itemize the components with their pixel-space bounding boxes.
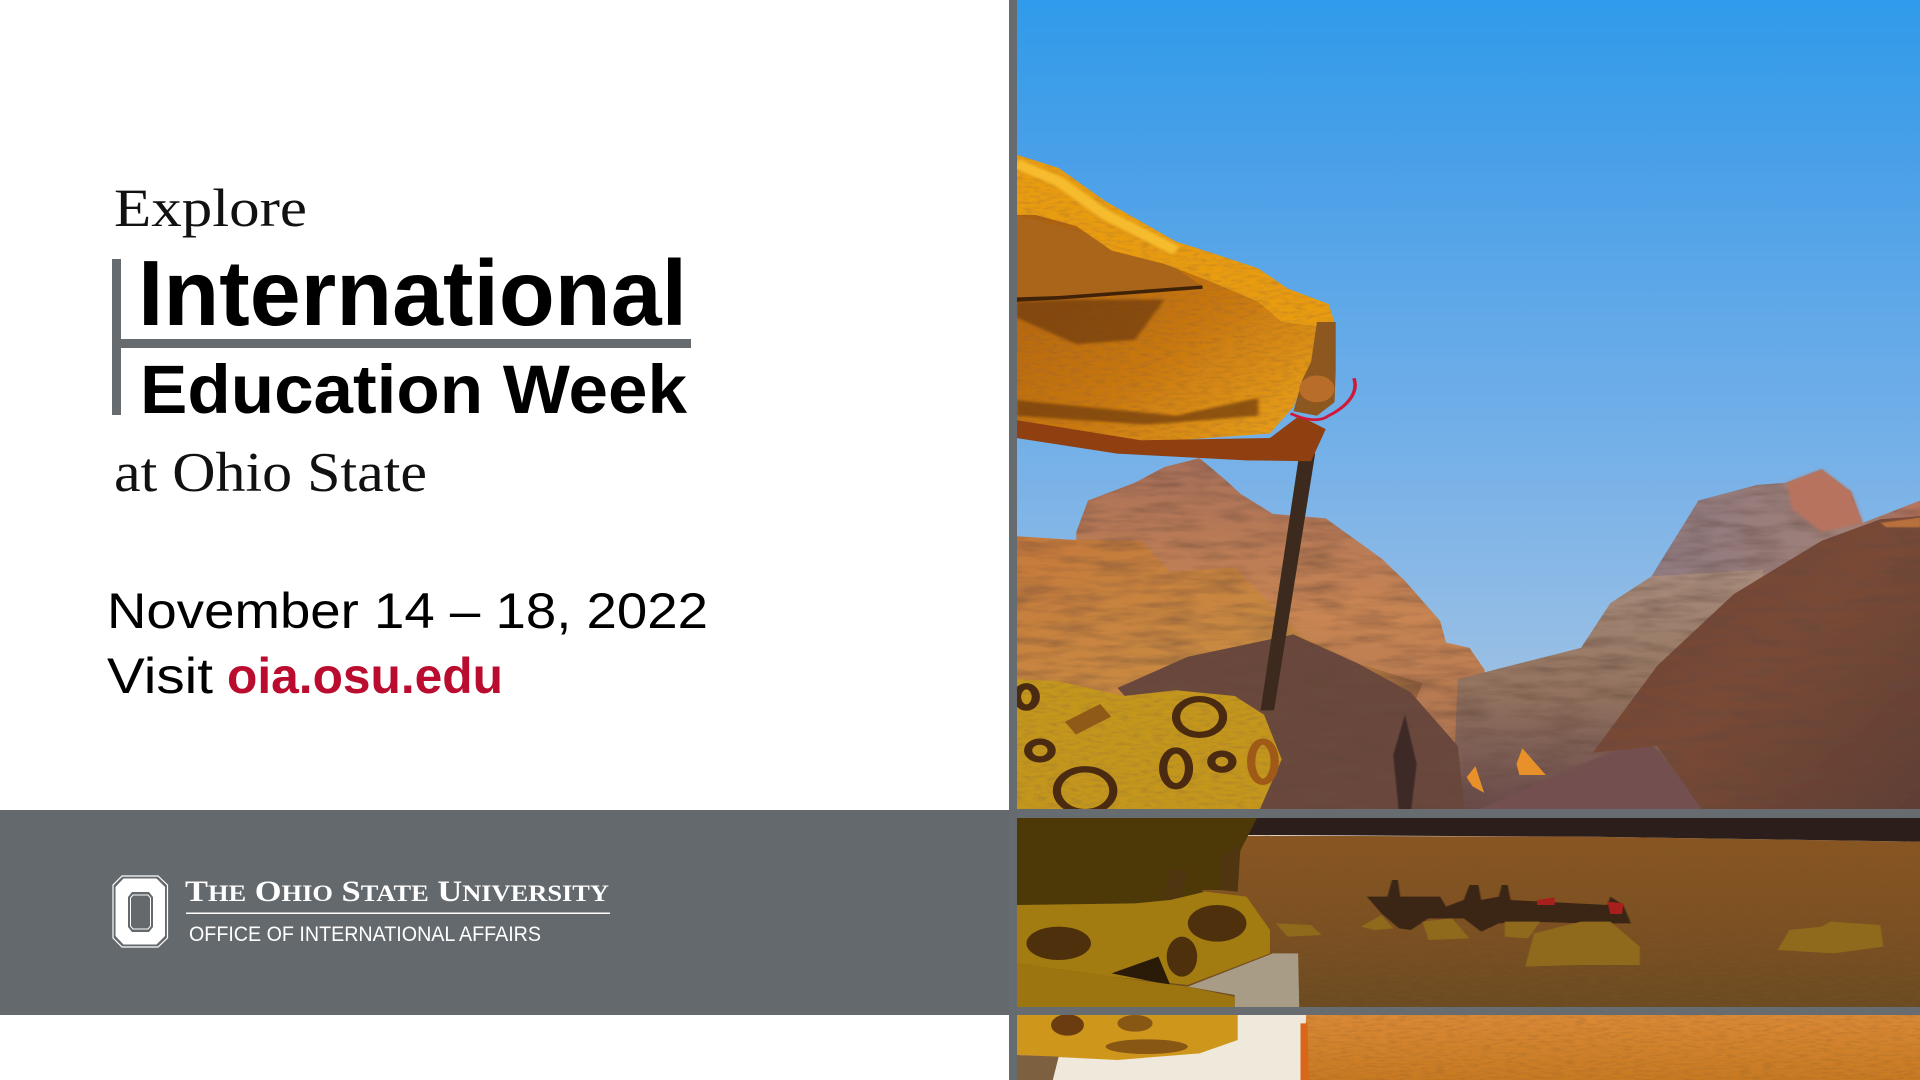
dark rock crack xyxy=(1393,715,1417,813)
red saddles xyxy=(1537,897,1623,914)
upper cloth fold xyxy=(1016,215,1202,297)
cliff lit edge xyxy=(1880,517,1920,527)
photograph: desert landscape with canopy and camels xyxy=(1016,0,1920,813)
rope highlight xyxy=(1016,163,1176,251)
seat flower pattern xyxy=(1017,686,1275,812)
camel caravan xyxy=(1367,880,1631,932)
heading: at Ohio State: at Ohio State xyxy=(114,442,427,504)
pole xyxy=(1261,454,1315,710)
dark cloth stain xyxy=(1016,300,1258,425)
dark seat upholstery xyxy=(1017,818,1257,905)
band contents xyxy=(1016,810,1920,1012)
mountains and canopy xyxy=(1016,155,1920,813)
dark central rock xyxy=(1117,634,1465,813)
upper horizontal divider xyxy=(1017,809,1920,818)
canopy tassel xyxy=(1299,376,1335,402)
orange sand xyxy=(1016,1012,1920,1080)
canopy tied corner xyxy=(1293,322,1336,416)
canopy rope xyxy=(1016,155,1336,326)
heading: Explore: Explore xyxy=(114,178,307,238)
strip contents xyxy=(1016,1012,1920,1080)
canopy cloth xyxy=(1017,214,1316,440)
cushion pattern xyxy=(1051,1014,1188,1054)
seat wooden support xyxy=(1221,855,1240,892)
desert ground xyxy=(1016,835,1920,1012)
bottom strip of photo xyxy=(1016,1012,1920,1080)
red string xyxy=(1291,378,1355,420)
left distant mountain xyxy=(1076,458,1485,743)
shadow gap xyxy=(1112,957,1170,985)
right lower strata xyxy=(1452,570,1763,813)
foreground right cliff xyxy=(1593,516,1920,813)
sky xyxy=(1017,0,1920,672)
cushion pattern xyxy=(1026,905,1246,977)
sand dune xyxy=(1480,746,1701,809)
heading: Education Week: Education Week xyxy=(140,351,688,428)
left orange rocks xyxy=(1016,536,1423,710)
visit link line: Visit xyxy=(107,648,213,704)
vertical divider xyxy=(1009,0,1017,1080)
right distant mountain xyxy=(1652,469,1920,576)
bottom cushion xyxy=(1017,964,1235,1007)
fold shadow line xyxy=(1016,285,1202,302)
lit rock flames xyxy=(1467,748,1546,793)
grey footer band left xyxy=(0,810,1009,1015)
seat cushion xyxy=(1016,679,1282,813)
logo: Ohio State block O xyxy=(113,876,168,947)
yellow cushion xyxy=(1016,1012,1238,1060)
lower horizontal divider xyxy=(1017,1007,1920,1015)
canopy hem xyxy=(1016,416,1326,461)
wordmark rule xyxy=(186,912,610,914)
desert bushes xyxy=(1276,915,1883,967)
shadow below cushion xyxy=(1016,1055,1059,1080)
white vehicle side xyxy=(1016,1012,1306,1080)
lower cushions xyxy=(1016,892,1270,985)
right mountain lit peak xyxy=(1786,469,1863,532)
heading: International: International xyxy=(138,241,687,345)
white vehicle rim xyxy=(1188,953,1299,1012)
office name: OFFICE OF INTERNATIONAL AFFAIRS xyxy=(189,923,541,946)
date: November 14 – 18, 2022 xyxy=(107,583,708,639)
wordmark: The Ohio State University: THE OHIO STATE UNIVERSITY xyxy=(185,875,609,908)
vehicle orange edge xyxy=(1300,1023,1309,1080)
dark rock strip xyxy=(1248,818,1920,842)
website link: oia.osu.edu xyxy=(227,648,503,704)
darkened band section of photo xyxy=(1016,810,1920,1012)
heading rule bracket xyxy=(112,259,691,415)
